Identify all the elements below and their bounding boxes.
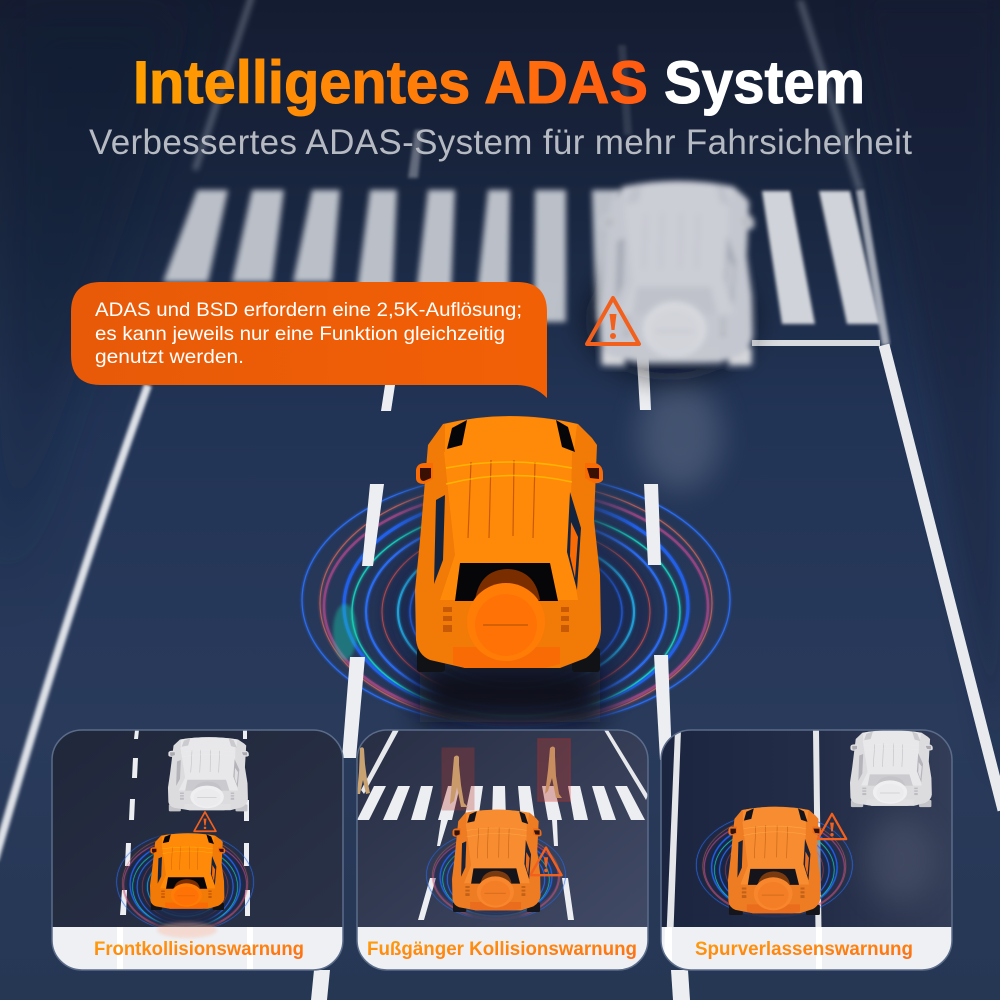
far lane dashes — [381, 45, 651, 411]
panel: Spurverlassenswarnung — [661, 730, 952, 970]
panel: Fußgänger Kollisionswarnung — [357, 730, 648, 970]
callout: resolution note — [71, 282, 547, 398]
title: Intelligentes ADAS — [133, 49, 648, 116]
crosswalk stripes blurred — [163, 190, 625, 322]
main orange car — [415, 416, 603, 722]
radar rings around main car — [302, 473, 730, 727]
pedestrian group — [357, 739, 570, 810]
near lane dashes — [311, 484, 690, 1000]
callout: resolution note: es kann jeweils nur eine Funktion gleichzeitig — [95, 324, 505, 345]
panel: Fußgänger Kollisionswarnung: Fußgänger Kollisionswarnung — [367, 939, 637, 960]
panel: Spurverlassenswarnung: Spurverlassenswarnung — [695, 939, 913, 960]
panel: Frontkollisionswarnung: Frontkollisionswarnung — [94, 939, 304, 960]
crosswalk stripes right — [762, 191, 880, 324]
icon: warning triangle on white car — [587, 298, 639, 344]
white car ahead — [585, 181, 755, 380]
callout: resolution note: genutzt werden. — [95, 347, 244, 368]
callout: resolution note: ADAS und BSD erfordern eine 2,5K-Auflösung; — [95, 300, 522, 321]
panel: Frontkollisionswarnung — [52, 730, 343, 970]
title: System — [664, 49, 865, 116]
subtitle: Verbessertes ADAS-System für mehr Fahrsicherheit — [89, 123, 912, 162]
